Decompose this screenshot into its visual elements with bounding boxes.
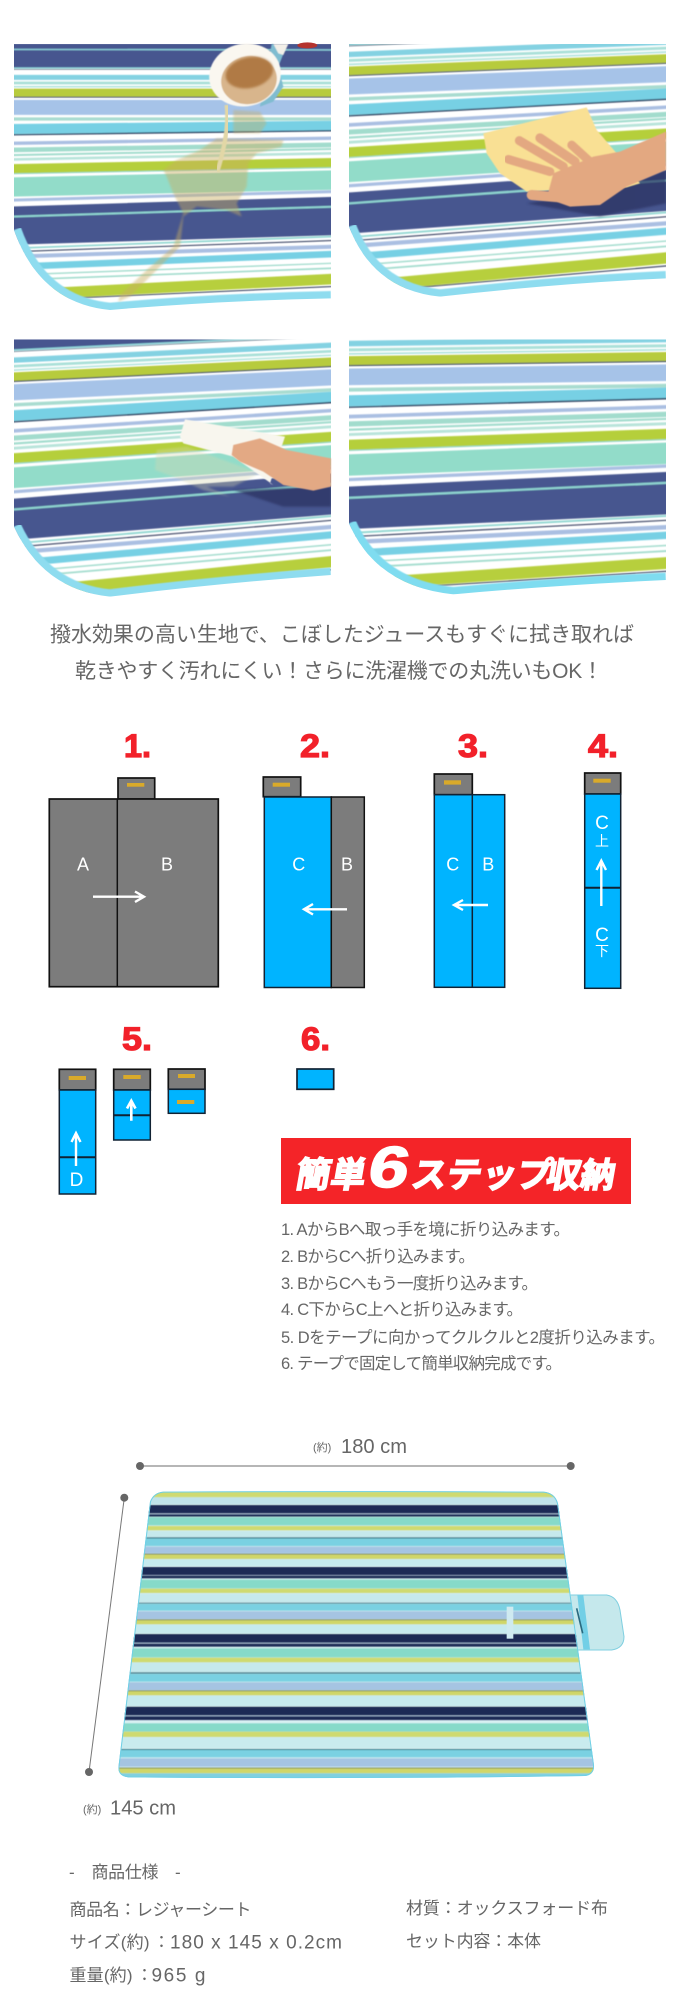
hand shadow [527,170,666,217]
specification list left: 965 g [152,1966,206,1986]
step 1: B [161,854,173,874]
specification heading: 商品仕様 [92,1863,158,1882]
width dimension line [136,1462,575,1470]
specification list right: 材質：オックスフォード布 [406,1899,608,1918]
specification heading: - [69,1863,75,1882]
step number 5: 5. [122,1021,152,1057]
step 6 [297,1021,334,1089]
step 1: A [77,854,89,874]
height dimension line [85,1494,128,1776]
step 2 [263,728,364,988]
hand [232,438,331,491]
specification list left [70,1900,342,1986]
specification list left: サイズ(約) [70,1933,150,1952]
specification heading: - [175,1863,181,1882]
carrying handle tab [570,1595,624,1650]
red object at the edge [297,42,317,48]
specification list left: 商品名：レジャーシート [70,1900,252,1920]
step 3 [434,728,505,987]
folding instructions list: 2. BからCへ折り込みます。 [281,1247,475,1266]
water mark [155,447,260,497]
photo panel: clean and dry sheet [349,340,666,594]
fold a [59,1069,96,1194]
step number 3: 3. [458,728,488,764]
folding instructions list: 3. BからCへもう一度折り込みます。 [281,1274,538,1293]
sponge [180,419,285,485]
step 2: B [341,854,353,874]
upper spill [233,110,267,133]
arrow left [454,900,488,910]
banner: easy 6 step storage [281,1135,631,1204]
banner: easy 6 step storage: ステップ [409,1156,555,1195]
width label [313,1436,407,1458]
step 4: 上 [595,833,609,849]
banner: easy 6 step storage: 収納 [544,1157,618,1195]
photo panel: dabbing with a white sponge [14,339,332,596]
hand [508,132,666,207]
description text: 乾きやすく汚れにくい！さらに洗濯機での丸洗いもOK！ [75,660,603,683]
step 3: B [482,854,494,874]
step 4 [585,728,621,988]
specification list left: ： [153,1933,170,1952]
folding instructions list: 1. AからBへ取っ手を境に折り込みます。 [281,1220,570,1239]
folding instructions list: 6. テープで固定して簡単収納完成です。 [281,1354,562,1373]
juice stream [217,105,227,172]
photo panel: juice poured on the sheet [14,42,331,310]
height label: 145 cm [110,1798,176,1820]
hand shadow [233,487,331,507]
step 5 [59,1021,205,1194]
step 4: C [595,813,609,834]
specification heading [69,1863,181,1882]
step 4: C [595,925,609,946]
full striped mat with side handle [110,1487,624,1780]
specification list right [406,1899,608,1951]
arrow right [93,892,144,902]
specification list right: セット内容：本体 [406,1932,541,1951]
folding instructions list: 4. C下からC上へと折り込みます。 [281,1300,523,1319]
specification list left: 180 x 145 x 0.2cm [170,1932,342,1954]
arrow up [596,861,606,906]
arrow left [304,904,347,914]
folding instructions list: 5. Dをテープに向かってクルクルと2度折り込みます。 [281,1328,665,1347]
step 1 [49,728,218,987]
height label: (約) [83,1802,101,1816]
closing strap [507,1607,513,1639]
specification list left: ： [136,1966,153,1985]
fold b [114,1069,150,1140]
step number 1: 1. [124,728,151,764]
folding instructions list [281,1220,665,1373]
banner: easy 6 step storage: 6 [364,1135,415,1200]
width label: (約) [313,1440,331,1454]
step number 2: 2. [300,728,330,764]
spill stain [118,138,283,302]
cup [203,37,288,113]
photo panel: wiping with yellow cloth [349,44,667,296]
mat body [110,1487,603,1780]
description text [50,624,634,683]
banner: easy 6 step storage: 簡単 [293,1156,369,1195]
fold c [168,1069,205,1113]
description text: 撥水効果の高い生地で、こぼしたジュースもすぐに拭き取れば [50,624,634,646]
specification list left: 重量(約) [70,1966,132,1985]
step number 4: 4. [588,728,618,764]
step number 6: 6. [301,1021,330,1057]
cloth [483,107,640,192]
step 4: 下 [595,943,609,959]
width label: 180 cm [341,1436,407,1458]
step 3: C [446,854,459,874]
fold a: D [70,1170,83,1191]
step 2: C [292,854,305,874]
